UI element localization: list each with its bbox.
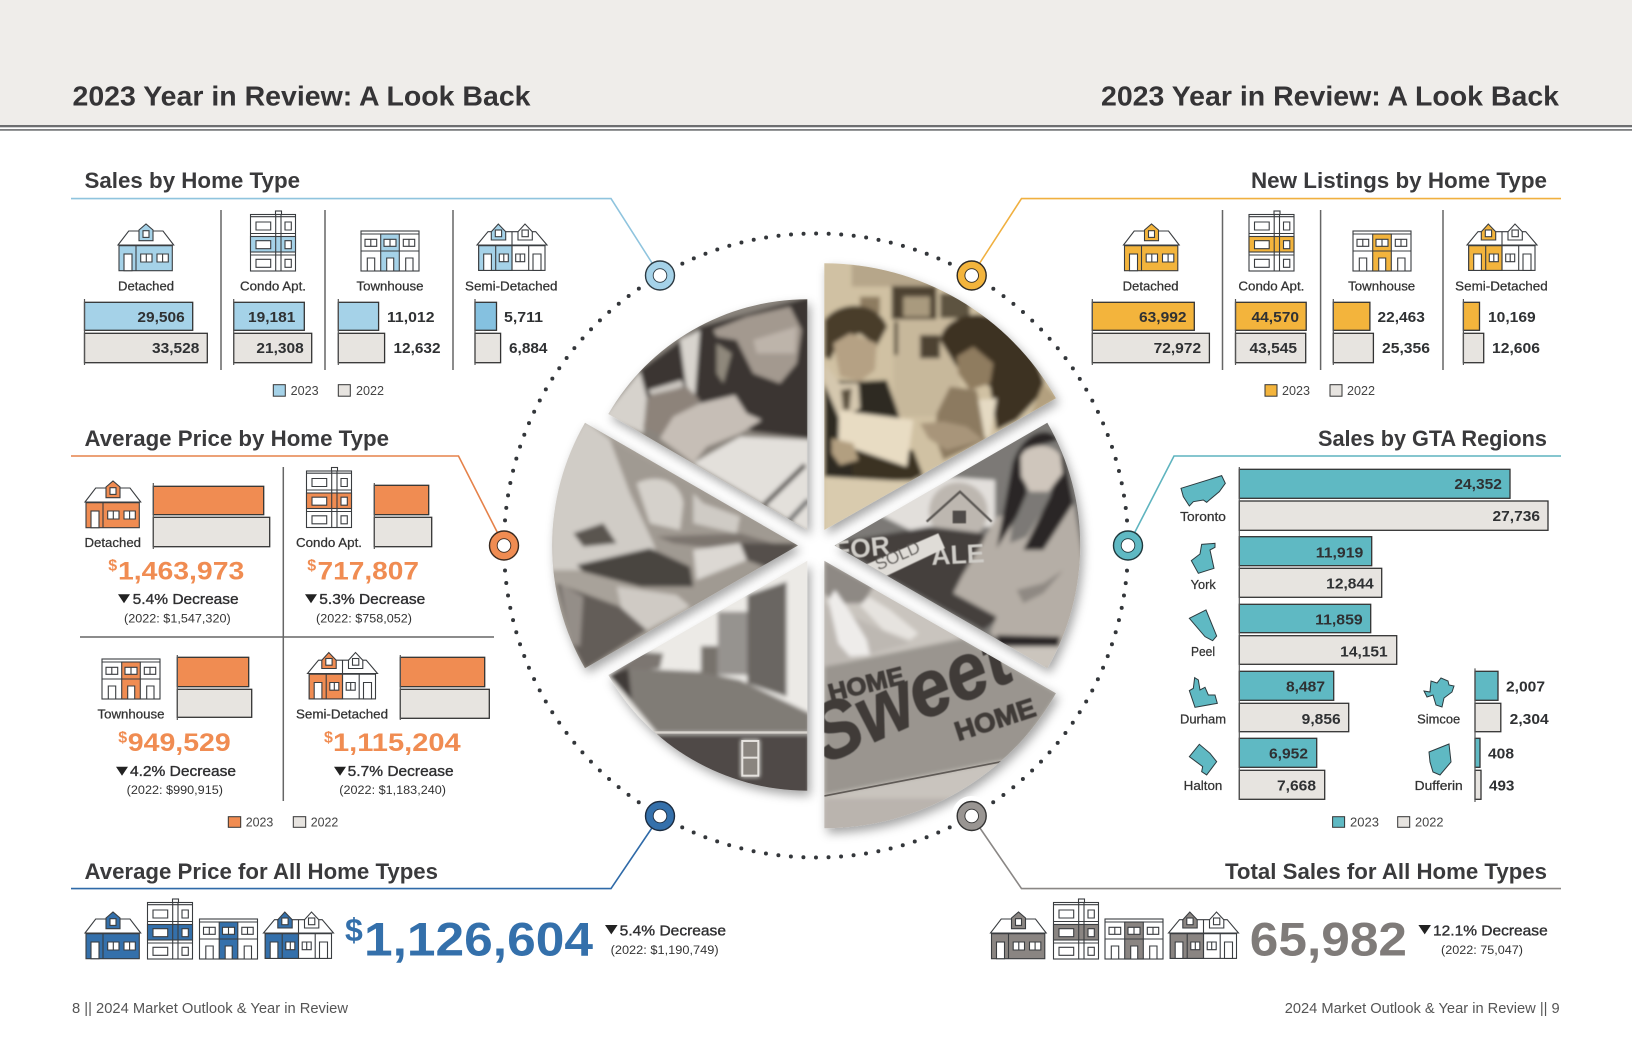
- icons: four home types: [85, 899, 334, 959]
- photo wedge: houses and tower: [600, 557, 813, 797]
- bars condo: 19,181: [248, 309, 295, 326]
- legend: 2022: [1347, 384, 1375, 398]
- decrease note: [1418, 923, 1548, 957]
- bars detached: 63,992: [1139, 309, 1186, 326]
- icons: four home types: [990, 899, 1238, 959]
- region labels: Toronto: [1180, 510, 1226, 524]
- bar chart: smaller regions: 2,007: [1506, 679, 1545, 696]
- bars condo: [1236, 299, 1306, 365]
- bar chart: smaller regions: 408: [1488, 745, 1514, 762]
- block: semi-detached price: Semi-Detached: [296, 707, 388, 721]
- heading: Total Sales for All Home Types: [1225, 859, 1547, 884]
- legend: 2023: [1282, 384, 1310, 398]
- bars townhouse: 11,012: [387, 309, 434, 326]
- bars condo: [234, 299, 312, 365]
- big price: 1,126,604: [364, 913, 593, 966]
- header band: [0, 0, 1632, 131]
- bar chart: main regions: 7,668: [1277, 778, 1316, 795]
- bar chart: smaller regions: 493: [1489, 778, 1514, 795]
- block: townhouse price: $: [118, 730, 127, 746]
- icon: semi-detached: [1467, 224, 1537, 270]
- bars townhouse: [1333, 299, 1430, 365]
- legend: 2022: [311, 816, 338, 830]
- bar chart: main regions: 11,919: [1316, 544, 1363, 561]
- bar chart: main regions: 11,859: [1315, 611, 1363, 628]
- heading: New Listings by Home Type: [1251, 168, 1547, 193]
- central photo collage: [540, 260, 1087, 833]
- photo wedge: home sweet home doormat: Sweet: [796, 612, 1027, 780]
- icon: condo: [1249, 211, 1294, 271]
- block: townhouse price: (2022: $990,915): [127, 785, 223, 797]
- block: detached price: 5.4% Decrease: [133, 592, 239, 608]
- big price: $: [345, 912, 363, 948]
- label townhouse: Townhouse: [1348, 280, 1415, 294]
- block: townhouse price: 4.2% Decrease: [130, 764, 236, 780]
- block: semi-detached price: [296, 652, 489, 797]
- bars detached: 29,506: [137, 309, 185, 326]
- block: detached price: Detached: [84, 536, 141, 550]
- legend: [228, 816, 338, 830]
- block: condo price: 5.3% Decrease: [319, 592, 425, 608]
- bars detached: 72,972: [1154, 340, 1201, 357]
- heading: Average Price for All Home Types: [84, 859, 438, 884]
- heading: Sales by Home Type: [84, 168, 300, 193]
- legend: [1333, 816, 1444, 830]
- bars semi-detached: [1463, 299, 1540, 365]
- bars semi-detached: [475, 299, 548, 365]
- block: detached price: $: [108, 558, 117, 575]
- block: detached price: 1,463,973: [118, 557, 244, 585]
- region labels: Halton: [1184, 779, 1222, 793]
- title left: 2023 Year in Review: A Look Back: [72, 80, 531, 112]
- label semi: Semi-Detached: [1455, 280, 1548, 294]
- Simcoe and Dufferin maps: [1424, 678, 1454, 775]
- label condo: Condo Apt.: [240, 280, 306, 294]
- region labels: Simcoe: [1417, 712, 1460, 726]
- photo wedge: home sweet home doormat: HOME: [951, 692, 1039, 747]
- photo wedge: home sweet home doormat: [796, 557, 1060, 833]
- panel: average price for all home types: [84, 859, 726, 966]
- region labels: York: [1191, 578, 1216, 592]
- legend: [1265, 384, 1375, 398]
- block: semi-detached price: $: [324, 730, 333, 746]
- legend: 2023: [246, 816, 273, 830]
- block: semi-detached price: (2022: $1,183,240): [339, 785, 446, 797]
- bar chart: smaller regions: [1475, 668, 1549, 802]
- legend: 2022: [356, 384, 384, 398]
- heading: Sales by GTA Regions: [1318, 426, 1547, 451]
- bars condo: 21,308: [256, 340, 304, 357]
- dotted circle: [504, 234, 1128, 858]
- bars townhouse: 22,463: [1378, 309, 1425, 326]
- bars semi-detached: 6,884: [509, 340, 548, 357]
- bar chart: smaller regions: 2,304: [1510, 711, 1549, 728]
- bars townhouse: 25,356: [1382, 340, 1430, 357]
- decrease note: (2022: 75,047): [1441, 945, 1523, 957]
- photo wedge: business people, sepia: [820, 260, 1060, 537]
- icon: detached: [118, 224, 174, 271]
- icon: condo: [250, 211, 296, 271]
- label detached: Detached: [1123, 280, 1179, 294]
- block: semi-detached price: 1,115,204: [333, 729, 461, 757]
- block: detached price: [84, 481, 270, 625]
- bars semi-detached: 5,711: [504, 309, 543, 326]
- photo wedge: home sweet home doormat: HOME: [826, 663, 907, 707]
- block: townhouse price: 949,529: [128, 729, 231, 757]
- bars detached: [1092, 299, 1209, 365]
- photo wedge: agent with sale sign: [830, 417, 1087, 677]
- label detached: Detached: [118, 280, 174, 294]
- bars condo: 43,545: [1250, 340, 1297, 357]
- photo wedge: keys handover: [608, 298, 816, 538]
- block: condo price: (2022: $758,052): [316, 613, 412, 625]
- icon: semi-detached: [477, 224, 547, 270]
- bars condo: 44,570: [1252, 309, 1299, 326]
- icon: detached: [1124, 224, 1179, 271]
- bars detached: [84, 299, 207, 365]
- legend: [273, 384, 384, 398]
- label semi: Semi-Detached: [465, 280, 558, 294]
- photo wedge: agent with sale sign: FOR: [832, 530, 892, 566]
- block: semi-detached price: 5.7% Decrease: [348, 764, 454, 780]
- block: condo price: 717,807: [318, 557, 419, 585]
- connector and ring: average price all types: [71, 796, 680, 889]
- panel: new listings by home type: [1092, 168, 1548, 398]
- block: detached price: (2022: $1,547,320): [124, 613, 231, 625]
- region labels: Durham: [1180, 712, 1226, 726]
- panel: sales by GTA regions: [1180, 426, 1549, 830]
- label townhouse: Townhouse: [356, 280, 424, 294]
- bar chart: main regions: 24,352: [1454, 476, 1502, 493]
- bar chart: main regions: [1239, 467, 1548, 800]
- connector and ring: total sales: [952, 796, 1561, 889]
- legend: 2023: [291, 384, 319, 398]
- bars townhouse: [338, 299, 440, 365]
- block: condo price: Condo Apt.: [296, 536, 362, 550]
- bar chart: main regions: 12,844: [1326, 575, 1374, 592]
- panel: average price by home type: [80, 426, 494, 830]
- block: townhouse price: Townhouse: [98, 707, 165, 721]
- photo wedge: money in hands: [540, 410, 807, 677]
- region labels: [1180, 510, 1463, 793]
- panel: sales by home type: [84, 168, 558, 398]
- connector and ring: new listings: [952, 199, 1561, 296]
- decrease note: 12.1% Decrease: [1433, 923, 1548, 939]
- connector and ring: sales by GTA regions: [1108, 456, 1561, 566]
- bar chart: main regions: 27,736: [1492, 508, 1540, 525]
- footer left: 8 || 2024 Market Outlook & Year in Review: [72, 1000, 348, 1017]
- decrease note: 5.4% Decrease: [620, 923, 726, 939]
- big total: 65,982: [1250, 913, 1407, 966]
- bars semi-detached: 10,169: [1488, 309, 1536, 326]
- region labels: Dufferin: [1415, 779, 1463, 793]
- footer right: 2024 Market Outlook & Year in Review || 9: [1285, 1000, 1560, 1017]
- connector and ring: sales by home type: [71, 199, 680, 296]
- label condo: Condo Apt.: [1238, 280, 1304, 294]
- region labels: Peel: [1191, 645, 1215, 659]
- bar chart: main regions: 8,487: [1286, 679, 1325, 696]
- block: condo price: [296, 468, 432, 625]
- bar chart: main regions: 6,952: [1269, 745, 1308, 762]
- title right: 2023 Year in Review: A Look Back: [1101, 80, 1559, 112]
- bar chart: main regions: 14,151: [1340, 644, 1388, 661]
- bars detached: 33,528: [152, 340, 199, 357]
- panel: total sales for all home types: [990, 859, 1548, 966]
- photo wedge: agent with sale sign: SOLD: [872, 537, 923, 574]
- bar chart: main regions: 9,856: [1302, 711, 1341, 728]
- legend: 2023: [1350, 816, 1379, 830]
- connector and ring: average price by home type: [71, 456, 524, 566]
- decrease note: (2022: $1,190,749): [611, 945, 719, 957]
- region maps: [1181, 476, 1225, 775]
- block: townhouse price: [98, 655, 252, 797]
- decrease note: [605, 923, 726, 957]
- heading: Average Price by Home Type: [84, 426, 389, 451]
- legend: 2022: [1415, 816, 1444, 830]
- bars semi-detached: 12,606: [1492, 340, 1540, 357]
- photo wedge: agent with sale sign: ALE: [930, 538, 985, 571]
- icon: townhouse: [1353, 231, 1411, 271]
- bars townhouse: 12,632: [394, 340, 440, 357]
- block: condo price: $: [307, 558, 316, 575]
- icon: townhouse: [361, 231, 419, 271]
